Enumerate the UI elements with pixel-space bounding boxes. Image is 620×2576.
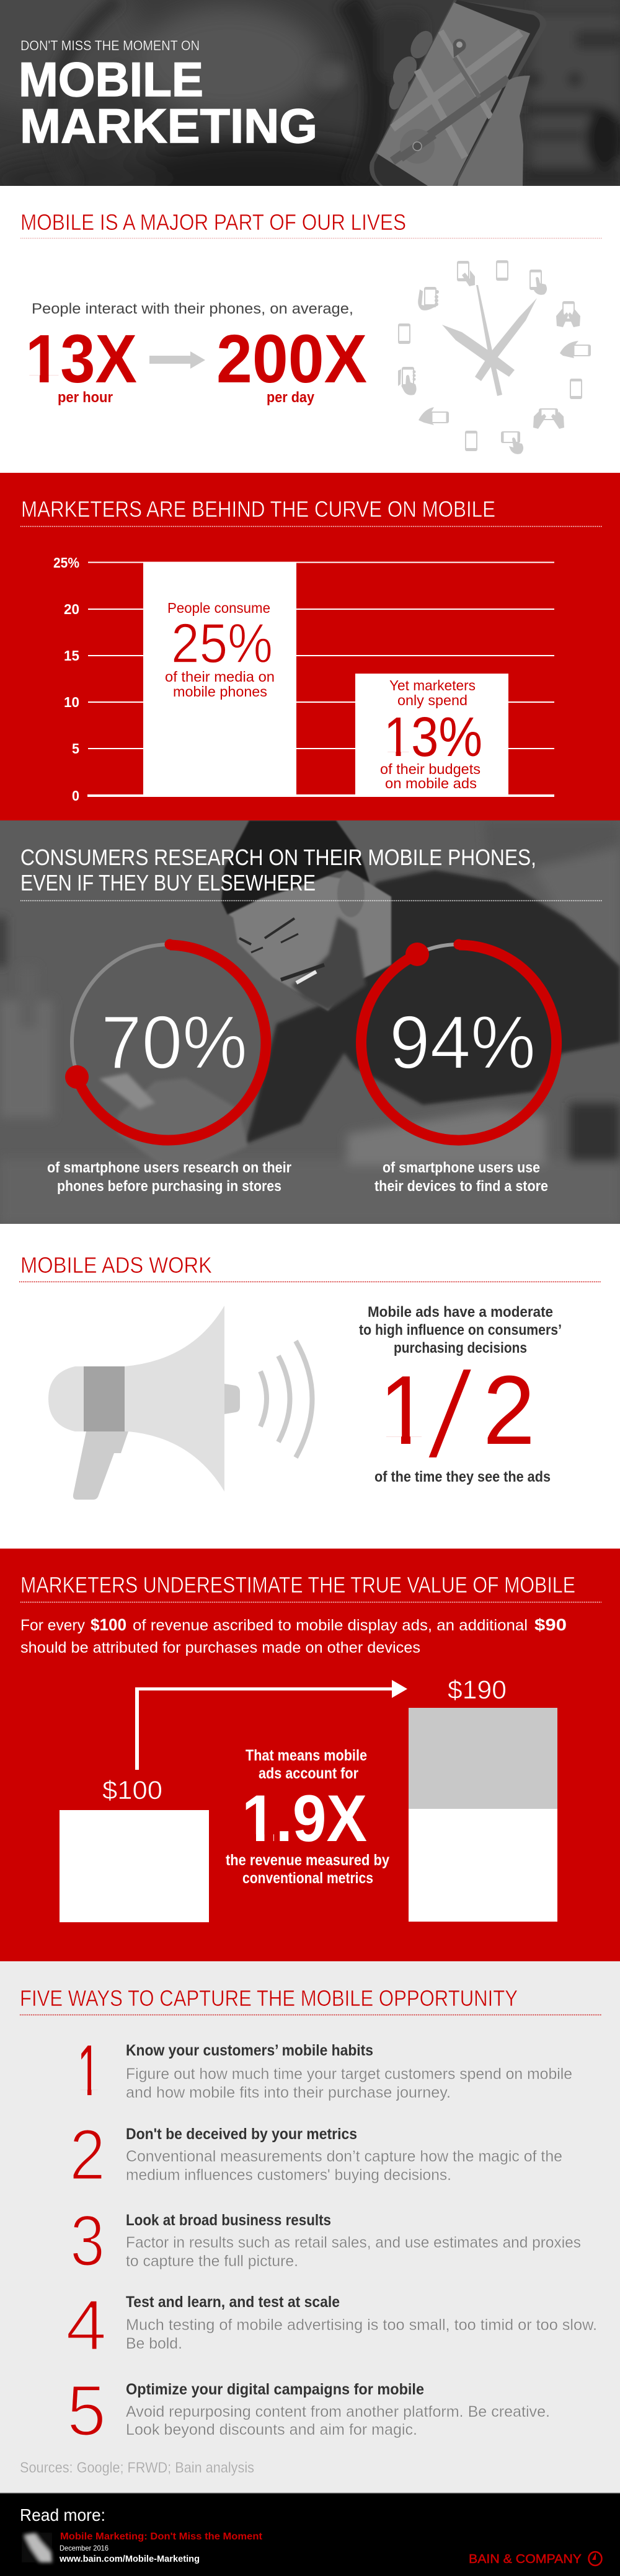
item 1: Figure out how much time your target customers spend on mobile	[126, 2065, 572, 2083]
item 1	[81, 2044, 572, 2101]
panel: consumers research background photo	[0, 820, 620, 1224]
bar: $190	[409, 1675, 557, 1922]
item 4	[66, 2285, 597, 2365]
title: mobile marketing: MARKETING	[20, 99, 317, 153]
item 2: Don't be deceived by your metrics	[126, 2125, 357, 2143]
stat: 13X per hour	[29, 335, 136, 405]
stat: 1.9X: ads account for	[259, 1765, 358, 1782]
heading: MARKETERS ARE BEHIND THE CURVE ON MOBILE	[21, 496, 495, 522]
title: mobile marketing: MOBILE	[19, 52, 203, 107]
text: read more: Read more:	[20, 2505, 105, 2525]
text: moderate to high influence	[359, 1304, 562, 1356]
icon: fingers behind phone	[389, 31, 433, 110]
text: of the time: of the time they see the ads	[374, 1469, 551, 1485]
bar: media consumption 25%: 25%	[171, 613, 273, 675]
item 3: to capture the full picture.	[126, 2253, 298, 2270]
donut chart: 70%	[65, 939, 268, 1140]
bar: $100: $100	[102, 1775, 162, 1805]
text: people interact: People interact with their phones, on average,	[32, 301, 353, 317]
photo: hand with phone	[118, 1078, 248, 1165]
icon: megaphone	[48, 1306, 312, 1500]
stat: one half: 2	[483, 1356, 535, 1465]
item 5: 5	[67, 2370, 106, 2451]
photo: eyes, brows, mouth	[239, 918, 324, 983]
text: 70% caption: phones before purchasing in stores	[57, 1178, 281, 1195]
axis labels: 25%	[53, 555, 79, 571]
panel: header banner photo	[0, 0, 620, 186]
bar: budget 13%	[355, 674, 508, 797]
photo: man's hair	[221, 820, 370, 915]
arrow	[149, 351, 205, 369]
bar: budget 13%: Yet marketers	[389, 677, 476, 693]
bar: budget 13%: on mobile ads	[385, 775, 477, 791]
item 3: 3	[70, 2200, 105, 2281]
text: report link: December 2016	[60, 2544, 108, 2552]
stat: one half: /	[425, 1348, 475, 1482]
bar: media consumption 25%: mobile phones	[173, 684, 267, 700]
heading: consumers research	[20, 845, 536, 895]
text: sources: Sources: Google; FRWD; Bain analysis	[20, 2460, 254, 2476]
arrow: from $100 to $190	[135, 1680, 407, 1770]
text: intro: should be attributed for purchases made on other devices	[20, 1639, 420, 1656]
stat: one half	[386, 1369, 531, 1457]
heading: consumers research: CONSUMERS RESEARCH ON THEIR MOBILE PHONES,	[20, 845, 536, 870]
item 1: 1	[78, 2030, 100, 2111]
text: 94% caption: their devices to find a store	[374, 1178, 548, 1195]
item 3: Factor in results such as retail sales, and use estimates and proxies	[126, 2234, 581, 2251]
item 5: Avoid repurposing content from another platform. Be creative.	[126, 2403, 550, 2420]
text: intro: $90	[534, 1615, 567, 1634]
heading: MOBILE IS A MAJOR PART OF OUR LIVES	[20, 209, 406, 235]
stat: 200X per day: 200X	[216, 321, 367, 397]
stat: 1.9X: conventional metrics	[242, 1870, 373, 1887]
item 3: Look at broad business results	[126, 2212, 331, 2229]
text: 94% caption: of smartphone users use	[383, 1159, 540, 1176]
axis labels: 10	[64, 694, 79, 710]
bar: budget 13%: only spend	[397, 692, 467, 708]
icon: smartphone with map	[370, 0, 546, 186]
axis labels: 0	[72, 788, 79, 804]
photo: man's face	[228, 874, 391, 1011]
text: report link: www.bain.com/Mobile-Marketing	[59, 2554, 200, 2564]
bar: budget 13%: 13%	[384, 706, 482, 768]
title: mobile marketing	[19, 52, 317, 153]
logo: bain & company: BAIN & COMPANY	[469, 2552, 582, 2566]
icon: clock of phones	[398, 260, 591, 454]
panel: marketers are behind the curve	[0, 473, 620, 820]
donut chart: 94%: 94%	[389, 1000, 536, 1084]
stat: 1.9X	[226, 1747, 389, 1887]
bar: media consumption 25%: of their media on	[165, 669, 275, 685]
text: moderate to high influence: to high influence on consumers’	[359, 1322, 562, 1339]
bar: $100	[60, 1775, 209, 1922]
axis labels: 5	[72, 741, 79, 757]
text: moderate to high influence: Mobile ads have a moderate	[368, 1304, 553, 1321]
subtitle: don't miss the moment on: DON'T MISS THE MOMENT ON	[20, 38, 200, 53]
stat: 1.9X: the revenue measured by	[226, 1852, 389, 1869]
item 2	[69, 2114, 562, 2195]
item 1: and how mobile fits into their purchase journey.	[126, 2084, 451, 2101]
heading: MOBILE ADS WORK	[20, 1252, 212, 1278]
item 5: Look beyond discounts and aim for magic.	[126, 2421, 417, 2438]
item 2: medium influences customers' buying decisions.	[126, 2166, 451, 2184]
item 5	[67, 2370, 550, 2451]
item 1: Know your customers’ mobile habits	[126, 2042, 373, 2059]
heading: FIVE WAYS TO CAPTURE THE MOBILE OPPORTUNITY	[20, 1985, 518, 2011]
text: report link: Mobile Marketing: Don't Miss the Moment	[60, 2531, 263, 2542]
item 5: Optimize your digital campaigns for mobile	[126, 2381, 424, 2398]
text: moderate to high influence: purchasing decisions	[394, 1340, 527, 1356]
axis labels: 15	[64, 648, 79, 664]
bar: media consumption 25%: People consume	[167, 600, 270, 616]
photo: man's sweater	[99, 820, 620, 1165]
stat: 1.9X: That means mobile	[246, 1747, 367, 1764]
bar: budget 13%: of their budgets	[380, 761, 480, 777]
panel: footer	[0, 2492, 620, 2576]
stat: 1.9X: 1.9X	[242, 1781, 367, 1855]
axis labels: 20	[64, 601, 79, 617]
icon: sound waves	[260, 1341, 312, 1457]
text: intro: For every	[20, 1617, 85, 1634]
panel: marketers underestimate	[0, 1549, 620, 1961]
panel: five ways	[0, 1961, 620, 2493]
stat: 200X per day: per day	[267, 389, 315, 406]
panel: mobile is a major part of our lives	[20, 214, 601, 454]
text: intro	[20, 1615, 567, 1656]
item 2: Conventional measurements don’t capture how the magic of the	[126, 2148, 562, 2165]
text: 70% caption	[47, 1159, 291, 1195]
chart gridlines	[87, 563, 554, 796]
image: report thumbnail	[22, 2533, 52, 2562]
heading: consumers research: EVEN IF THEY BUY ELSEWHERE	[20, 870, 316, 895]
clock hands	[442, 285, 537, 396]
text: intro: of revenue ascribed to mobile display ads, an additional	[133, 1617, 528, 1634]
donut chart: 94%	[361, 939, 557, 1140]
text: report link	[59, 2531, 263, 2564]
item 4: Be bold.	[126, 2335, 182, 2352]
item 4: Much testing of mobile advertising is too small, too timid or too slow.	[126, 2316, 597, 2334]
bar: $190: $190	[448, 1675, 507, 1704]
text: 94% caption	[374, 1159, 548, 1195]
item 4: 4	[66, 2285, 107, 2365]
axis labels	[53, 555, 79, 804]
icon: thumb holding phone	[458, 76, 530, 186]
stat: 13X per hour: per hour	[58, 389, 113, 406]
text: intro: $100	[91, 1615, 126, 1634]
panel: mobile ads work	[19, 1257, 600, 1500]
donut chart: 70%: 70%	[101, 1000, 247, 1084]
item 4: Test and learn, and test at scale	[126, 2293, 340, 2311]
text: 70% caption: of smartphone users research on their	[47, 1159, 291, 1176]
stat: 13X per hour: 13X	[25, 321, 137, 397]
bar: media consumption 25%	[143, 562, 296, 797]
item 3	[70, 2200, 581, 2281]
item 2: 2	[69, 2114, 105, 2195]
stat: one half: 1	[379, 1356, 429, 1465]
bar chart	[53, 555, 554, 804]
